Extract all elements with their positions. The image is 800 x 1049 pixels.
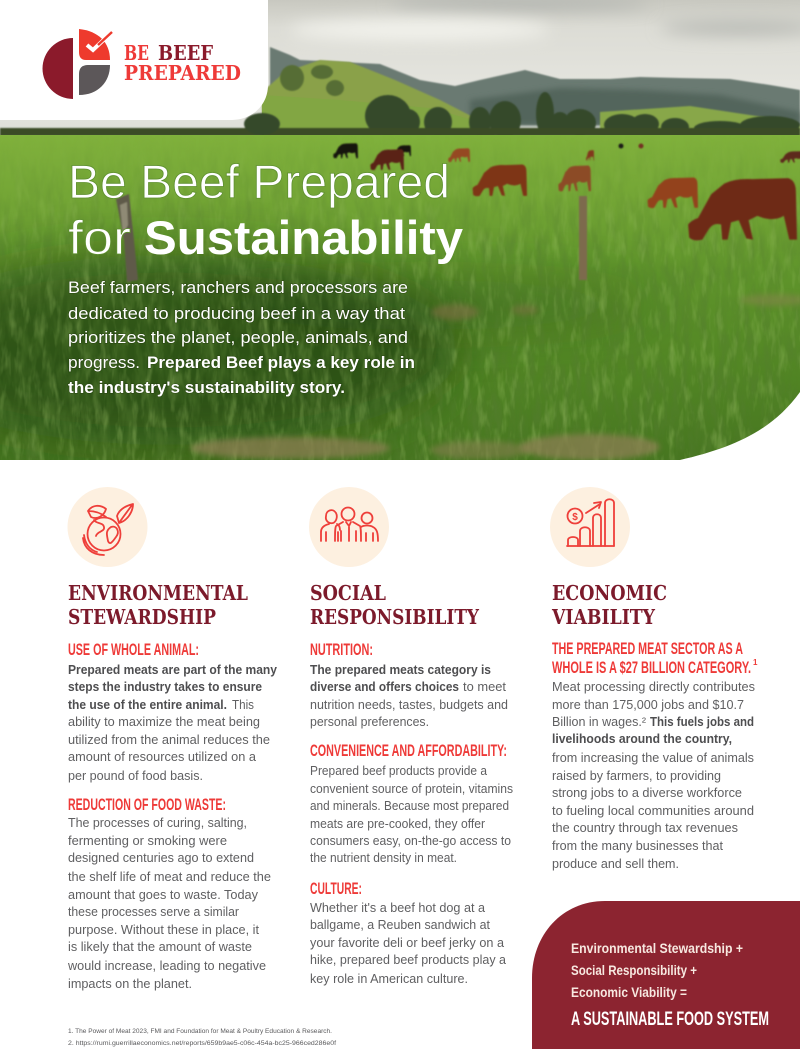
- green hills: [262, 60, 800, 140]
- subsection: culture: Whether it's a beef hot dog at a: [310, 901, 485, 915]
- hero intro paragraph: Prepared Beef plays a key role in: [147, 353, 415, 372]
- subsection: $27 billion category: [552, 640, 758, 677]
- hero title: for: [68, 211, 131, 264]
- subsection: use of whole animal: steps the industry takes to ensure: [68, 680, 262, 694]
- callout: a sustainable food system: Economic Viability =: [571, 984, 687, 1000]
- subsection: reduction of food waste: the shelf life of meat and reduce the: [68, 870, 271, 884]
- pasture: [0, 135, 800, 465]
- subsection: use of whole animal: This: [232, 698, 254, 712]
- subsection: culture: CULTURE:: [310, 880, 362, 898]
- icon: rising bar chart with dollar coin: $: [572, 512, 578, 523]
- logo wordmark: BEEF: [158, 41, 213, 65]
- economic body text: the country through tax revenues: [552, 821, 738, 835]
- hero intro paragraph: prioritizes the planet, people, animals, and: [68, 328, 408, 347]
- subsection: reduction of food waste: [67, 796, 271, 991]
- heading: SOCIAL: [310, 581, 386, 605]
- subsection: reduction of food waste: would increase, leading to negative: [67, 959, 266, 973]
- subsection: convenience and affordability: consumers easy, on-the-go access to: [310, 834, 511, 848]
- subsection: reduction of food waste: amount that goes to waste. Today: [68, 888, 259, 902]
- hero intro paragraph: Beef farmers, ranchers and processors are: [68, 278, 408, 297]
- economic body text: to fueling local communities around: [552, 804, 754, 818]
- icon: rising bar chart with dollar coin: [550, 487, 630, 567]
- heading: RESPONSIBILITY: [310, 605, 479, 629]
- logo mark: [43, 29, 112, 99]
- economic body text: Meat processing directly contributes: [552, 680, 755, 694]
- logo card: [0, 0, 268, 120]
- hero intro paragraph: dedicated to producing beef in a way that: [68, 304, 405, 323]
- heading: [310, 581, 479, 629]
- economic body text: raised by farmers, to providing: [552, 769, 721, 783]
- subsection: reduction of food waste: purpose. Without these in place, it: [68, 923, 260, 937]
- economic body text: strong jobs to a diverse workforce: [552, 786, 742, 800]
- hero intro paragraph: progress.: [68, 353, 140, 372]
- subsection: culture: your favorite deli or beef jerky on a: [310, 936, 504, 950]
- callout: a sustainable food system: Environmental Stewardship +: [571, 940, 743, 956]
- economic body text: from the many businesses that: [552, 839, 724, 853]
- subsection: convenience and affordability: and minerals. Because most prepared: [310, 799, 509, 813]
- subsection: reduction of food waste: impacts on the planet.: [68, 977, 192, 991]
- heading: [68, 581, 248, 629]
- column: economic viability: [550, 487, 758, 871]
- subsection: convenience and affordability: the nutrient density in meat.: [310, 851, 457, 865]
- sky: [0, 0, 800, 140]
- logo wordmark: [124, 41, 241, 85]
- subsection: reduction of food waste: REDUCTION OF FOOD WASTE:: [68, 796, 226, 814]
- footnotes: [68, 1028, 336, 1047]
- tree line: [0, 65, 800, 139]
- subsection: nutrition: personal preferences.: [310, 715, 429, 729]
- subsection: use of whole animal: ability to maximize the meat being: [68, 715, 260, 729]
- economic body text: from increasing the value of animals: [552, 751, 754, 765]
- hero intro paragraph: the industry's sustainability story.: [68, 378, 345, 397]
- cattle: [333, 143, 800, 240]
- callout: a sustainable food system: Social Responsibility +: [571, 962, 697, 978]
- subsection: use of whole animal: utilized from the animal reduces the: [68, 733, 270, 747]
- economic body text: This fuels jobs and: [650, 715, 754, 729]
- subsection: culture: ballgame, a Reuben sandwich at: [310, 918, 491, 932]
- subsection: use of whole animal: USE OF WHOLE ANIMAL:: [68, 641, 199, 659]
- economic body text: livelihoods around the country,: [552, 732, 732, 746]
- subsection: use of whole animal: the use of the entire animal.: [68, 698, 227, 712]
- heading: ENVIRONMENTAL: [68, 581, 248, 605]
- subsection: nutrition: to meet: [463, 680, 507, 694]
- icon: globe with leaves: [68, 487, 148, 567]
- subsection: reduction of food waste: The processes of curing, salting,: [68, 816, 247, 830]
- heading: ECONOMIC: [552, 581, 667, 605]
- subsection: $27 billion category: 1: [753, 658, 758, 667]
- subsection: reduction of food waste: is likely that the amount of waste: [68, 940, 252, 954]
- subsection: use of whole animal: per pound of food basis.: [68, 769, 203, 783]
- hero title: Be Beef Prepared: [68, 155, 450, 208]
- subsection: convenience and affordability: CONVENIENCE AND AFFORDABILITY:: [310, 742, 507, 760]
- hero title: [68, 155, 463, 264]
- subsection: culture: hike, prepared beef products play a: [310, 953, 506, 967]
- fence posts: [116, 194, 587, 282]
- subsection: nutrition: diverse and offers choices: [310, 680, 459, 694]
- footnotes: 1. The Power of Meat 2023, FMI and Foundation for Meat & Poultry Education & Research.: [68, 1028, 332, 1035]
- heading: VIABILITY: [551, 605, 655, 629]
- icon: three people: [309, 487, 389, 567]
- subsection: use of whole animal: [68, 641, 277, 783]
- distant mountains: [270, 47, 800, 125]
- subsection: nutrition: The prepared meats category is: [310, 663, 491, 677]
- subsection: use of whole animal: Prepared meats are part of the many: [68, 663, 277, 677]
- subsection: culture: [310, 880, 506, 986]
- economic body text: Billion in wages.²: [552, 715, 646, 729]
- subsection: convenience and affordability: convenient source of protein, vitamins: [310, 782, 513, 796]
- logo wordmark: PREPARED: [124, 61, 241, 85]
- subsection: reduction of food waste: designed centuries ago to extend: [68, 851, 254, 865]
- economic body text: [552, 680, 755, 871]
- subsection: use of whole animal: amount of resources utilized on a: [68, 750, 256, 764]
- footnotes: 2. https://rumi.guerrillaeconomics.net/reports/659b9ae5-c06c-454a-bc25-966ced286e0f: [68, 1040, 336, 1047]
- hero title: Sustainability: [144, 211, 463, 264]
- logo wordmark: BE: [124, 41, 149, 65]
- subsection: convenience and affordability: Prepared beef products provide a: [310, 764, 487, 778]
- callout: a sustainable food system: [532, 901, 800, 1049]
- subsection: nutrition: nutrition needs, tastes, budgets and: [310, 698, 508, 712]
- column: social responsibility: [309, 487, 513, 986]
- economic body text: produce and sell them.: [552, 857, 679, 871]
- hero photo: cattle grazing in a green pasture: [0, 0, 800, 465]
- heading: [551, 581, 667, 629]
- subsection: convenience and affordability: [310, 742, 513, 865]
- column: environmental stewardship: [67, 487, 277, 991]
- subsection: nutrition: NUTRITION:: [310, 641, 373, 659]
- subsection: convenience and affordability: meats are pre-cooked, they offer: [310, 817, 485, 831]
- subsection: reduction of food waste: fermenting or smoking were: [68, 834, 227, 848]
- economic body text: more than 175,000 jobs and $10.7: [552, 698, 744, 712]
- subsection: culture: key role in American culture.: [310, 972, 468, 986]
- subsection: reduction of food waste: these processes serve a similar: [68, 905, 239, 919]
- subsection: nutrition: [310, 641, 508, 729]
- heading: STEWARDSHIP: [68, 605, 216, 629]
- hero intro paragraph: [68, 278, 415, 397]
